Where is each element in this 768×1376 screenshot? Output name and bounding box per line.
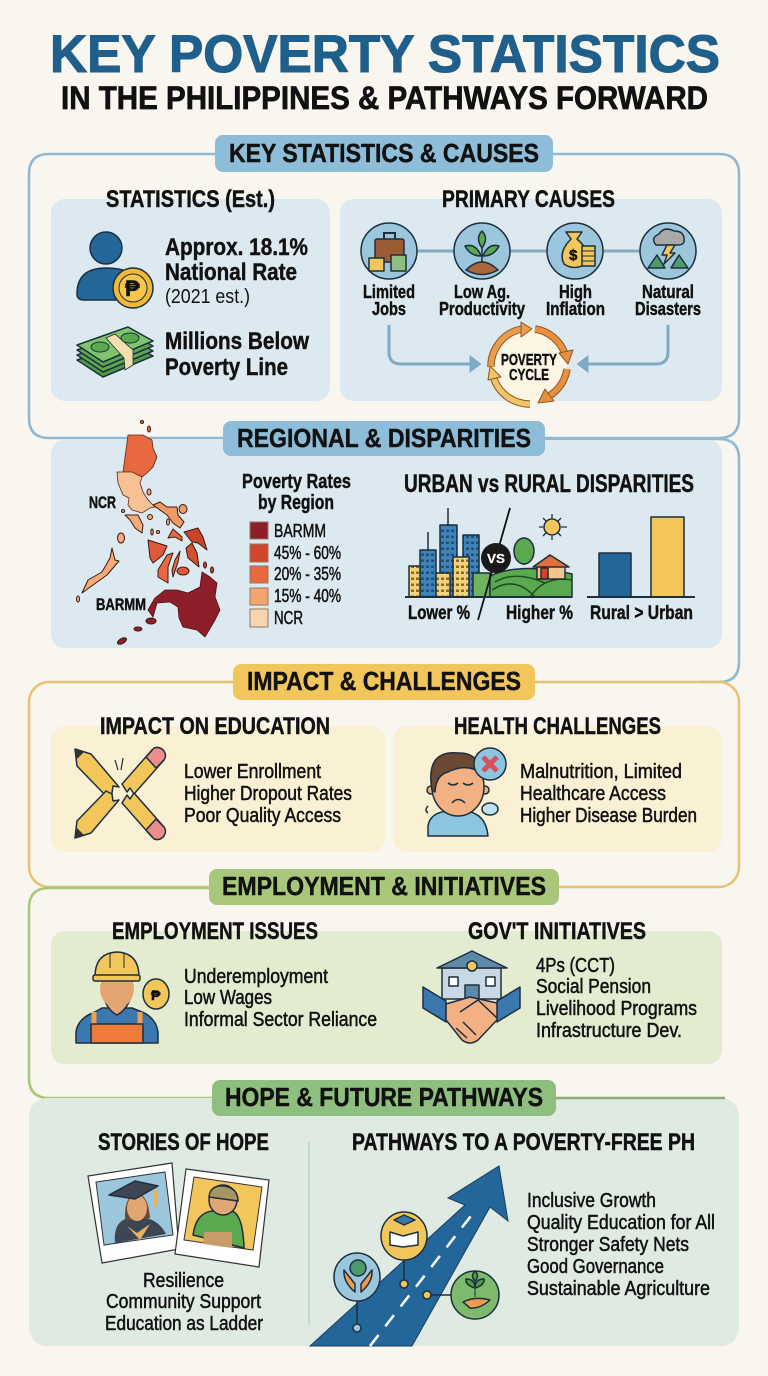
icon: education milestone	[381, 1212, 427, 1288]
legend: poverty rates by region: 45% - 60%	[274, 543, 341, 563]
icon: person with peso coin: ₱	[125, 276, 140, 301]
education impact list: Poor Quality Access	[184, 805, 341, 827]
map labels: BARMM	[96, 595, 146, 614]
government initiatives list: 4Ps (CCT)	[536, 955, 615, 977]
urban vs rural labels: Rural > Urban	[590, 603, 693, 624]
legend: poverty rates by region: NCR	[274, 608, 303, 628]
icon: stack of cash	[77, 327, 153, 377]
urban vs rural labels: Lower %	[408, 603, 470, 624]
government initiatives list: Social Pension	[536, 976, 651, 998]
poverty cycle	[488, 322, 573, 404]
icon: limited jobs briefcase	[361, 223, 417, 279]
heading: stories of hope: STORIES OF HOPE	[98, 1129, 269, 1156]
title: KEY POVERTY STATISTICS	[50, 25, 720, 84]
pathways list: Inclusive Growth	[527, 1190, 656, 1212]
panel: employment and government initiatives	[51, 918, 722, 1064]
education impact list	[184, 761, 352, 827]
panel: health challenges: HEALTH CHALLENGES	[454, 713, 661, 740]
arrows into poverty cycle	[389, 325, 668, 370]
cause labels: Natural	[642, 281, 694, 302]
health challenges list: Healthcare Access	[520, 783, 666, 805]
heading: employment issues: EMPLOYMENT ISSUES	[112, 918, 318, 945]
stat: national rate: National Rate	[165, 259, 297, 286]
photos: graduate and farmer	[88, 1163, 269, 1267]
cause labels: Limited	[363, 281, 415, 302]
bar chart: rural greater than urban	[587, 517, 695, 597]
icon: construction worker: ₱	[151, 987, 161, 1003]
icon: natural disasters storm	[640, 223, 696, 279]
illustration: city versus farm	[405, 508, 572, 620]
urban vs rural labels	[408, 603, 693, 624]
panel: primary causes	[340, 186, 722, 404]
stat: national rate: Approx. 18.1%	[165, 234, 308, 261]
urban vs rural labels: Higher %	[506, 603, 573, 624]
education impact list: Lower Enrollment	[184, 761, 321, 783]
government initiatives list	[536, 955, 697, 1042]
legend: poverty rates by region: 20% - 35%	[274, 564, 341, 584]
panel: statistics: STATISTICS (Est.)	[106, 186, 275, 213]
employment issues list: Informal Sector Reliance	[184, 1009, 377, 1031]
pathways list: Sustainable Agriculture	[527, 1278, 710, 1300]
section: hope and future pathways	[29, 1080, 739, 1346]
government initiatives list: Livelihood Programs	[536, 998, 697, 1020]
cause labels: Low Ag.	[454, 281, 510, 302]
government initiatives list: Infrastructure Dev.	[536, 1020, 682, 1042]
map labels	[89, 493, 146, 614]
arrow: road to a poverty-free future	[310, 1166, 508, 1346]
cause labels: Productivity	[439, 298, 526, 319]
stories of hope list: Education as Ladder	[105, 1313, 263, 1335]
employment issues list: Underemployment	[184, 966, 328, 988]
stat: millions below poverty line: Millions Below	[165, 328, 310, 355]
cause labels	[363, 281, 701, 319]
panel: impact on education	[51, 713, 385, 852]
icon: sick child	[426, 748, 506, 836]
cause labels: Inflation	[546, 298, 605, 319]
poverty cycle: CYCLE	[509, 367, 549, 384]
icon: agriculture milestone	[423, 1271, 499, 1319]
heading: government initiatives: GOV'T INITIATIVES	[468, 918, 646, 945]
heading badge: hope and future pathways: HOPE & FUTURE PATHWAYS	[225, 1082, 543, 1112]
map labels: NCR	[89, 493, 116, 512]
icon: construction worker	[76, 952, 169, 1043]
pathways list: Good Governance	[527, 1256, 664, 1278]
legend: poverty rates by region	[242, 471, 351, 628]
section: impact and challenges	[29, 664, 739, 887]
icon: broken pencils	[75, 747, 166, 840]
employment issues list: Low Wages	[184, 987, 272, 1009]
icon: high inflation money bag	[547, 223, 603, 279]
stories of hope list: Community Support	[106, 1291, 261, 1313]
cause labels: Disasters	[635, 298, 701, 319]
icon: low agricultural productivity seedling	[454, 223, 510, 279]
section: employment and initiatives	[29, 869, 722, 1098]
poverty cycle: POVERTY	[501, 352, 557, 369]
employment issues list	[184, 966, 377, 1031]
legend: poverty rates by region: Poverty Rates	[242, 471, 351, 493]
map: Philippines poverty by region	[76, 420, 220, 646]
heading badge: employment and initiatives: EMPLOYMENT & INITIATIVES	[222, 871, 546, 901]
panel: primary causes: PRIMARY CAUSES	[442, 186, 615, 213]
illustration: city versus farm: VS	[487, 551, 505, 566]
icon: government building with handshake	[423, 951, 520, 1043]
stat: national rate: (2021 est.)	[165, 285, 250, 308]
cause labels: Jobs	[372, 298, 406, 319]
panel: statistics	[51, 186, 330, 401]
stat: national rate	[165, 234, 308, 308]
health challenges list: Higher Disease Burden	[520, 805, 697, 827]
icon: person with peso coin	[77, 232, 153, 308]
stat: millions below poverty line	[165, 328, 310, 381]
legend: poverty rates by region: 15% - 40%	[274, 586, 341, 606]
title: IN THE PHILIPPINES & PATHWAYS FORWARD	[61, 80, 708, 116]
icon: care and environment milestone	[334, 1253, 380, 1332]
stories of hope list	[105, 1270, 263, 1335]
health challenges list: Malnutrition, Limited	[520, 761, 682, 783]
heading badge: regional and disparities: REGIONAL & DISPARITIES	[237, 423, 531, 453]
title	[50, 25, 720, 116]
heading badge: impact and challenges: IMPACT & CHALLENGES	[247, 666, 521, 696]
heading: pathways to a poverty-free PH: PATHWAYS TO A POVERTY-FREE PH	[352, 1129, 695, 1156]
education impact list: Higher Dropout Rates	[184, 783, 352, 805]
cause labels: High	[559, 281, 592, 302]
section: regional and disparities	[51, 420, 739, 682]
heading badge: key statistics: KEY STATISTICS & CAUSES	[229, 138, 539, 168]
panel: health challenges	[393, 713, 722, 852]
icon: high inflation money bag: $	[569, 247, 578, 264]
pathways list	[527, 1190, 715, 1300]
stories of hope list: Resilience	[143, 1270, 224, 1292]
panel: regional map and disparities	[51, 420, 722, 648]
section: key statistics and causes	[29, 135, 739, 438]
legend: poverty rates by region: BARMM	[274, 521, 326, 541]
pathways list: Stronger Safety Nets	[527, 1234, 689, 1256]
health challenges list	[520, 761, 697, 827]
panel: impact on education: IMPACT ON EDUCATION	[100, 713, 330, 740]
legend: poverty rates by region: by Region	[258, 492, 334, 514]
stat: millions below poverty line: Poverty Line	[165, 354, 288, 381]
pathways list: Quality Education for All	[527, 1212, 715, 1234]
